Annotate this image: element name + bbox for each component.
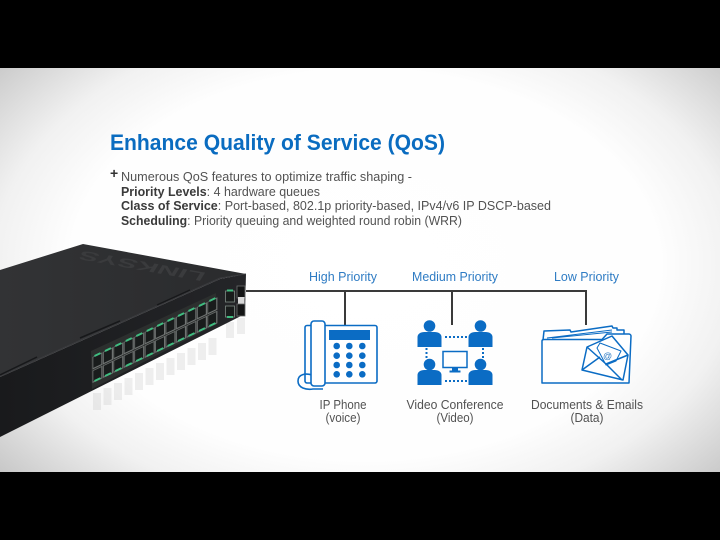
edge highlight (0, 274, 246, 376)
low priority: Low Priority (554, 270, 620, 284)
lid grooves (0, 290, 190, 375)
envelope (582, 336, 628, 380)
person top left (418, 320, 442, 347)
intro line: Numerous QoS features to optimize traffic shaping - (121, 170, 412, 184)
network switch (0, 244, 246, 437)
medium priority: Medium Priority (412, 270, 499, 284)
connection lines (246, 291, 586, 325)
caption: documents and emails: Documents & Emails (531, 398, 643, 412)
caption: IP phone: (voice) (326, 411, 360, 425)
priority levels: Priority Levels: 4 hardware queues (121, 185, 320, 199)
cord (298, 374, 323, 389)
caption: documents and emails: (Data) (570, 411, 604, 425)
top face (0, 244, 246, 377)
handset (311, 321, 325, 386)
person bottom left (418, 359, 442, 385)
envelope folds (582, 347, 628, 380)
caption: video conference: Video Conference (406, 398, 504, 412)
icon: documents and emails folder: @ (603, 351, 612, 361)
background panel (0, 68, 720, 472)
caption: video conference (406, 398, 504, 425)
logo on lid: LINKSYS (75, 247, 209, 283)
device captions (320, 398, 643, 425)
feature text block (110, 165, 551, 228)
bullet plus: + (110, 165, 118, 181)
icon: documents and emails folder (542, 326, 631, 383)
screen (329, 330, 370, 340)
monitor (443, 352, 467, 372)
folder (542, 334, 631, 383)
RJ45 ports (92, 297, 217, 383)
caption: documents and emails (531, 398, 643, 425)
caption: video conference: (Video) (436, 411, 474, 425)
switch reflection (93, 318, 245, 410)
priority labels (309, 270, 620, 284)
letter with at sign (597, 343, 621, 365)
ports panel (91, 293, 217, 389)
papers (543, 326, 624, 340)
icon: video conference (418, 320, 492, 385)
dotted links (426, 337, 483, 381)
port LEDs (94, 298, 215, 381)
keypad (333, 343, 366, 378)
icon: IP phone (298, 321, 377, 389)
scheduling: Scheduling: Priority queuing and weighted round robin (WRR) (121, 214, 462, 228)
person bottom right (468, 359, 492, 385)
caption: IP phone (320, 398, 367, 425)
person top right (468, 320, 492, 347)
caption: IP phone: IP Phone (320, 398, 367, 412)
class of service: Class of Service: Port-based, 802.1p priority-based, IPv4/v6 IP DSCP-based (121, 199, 551, 213)
uplink ports (226, 286, 245, 318)
phone body (305, 326, 377, 383)
title: Enhance Quality of Service (QoS) (110, 130, 445, 155)
front face (0, 274, 246, 437)
high priority: High Priority (309, 270, 378, 284)
